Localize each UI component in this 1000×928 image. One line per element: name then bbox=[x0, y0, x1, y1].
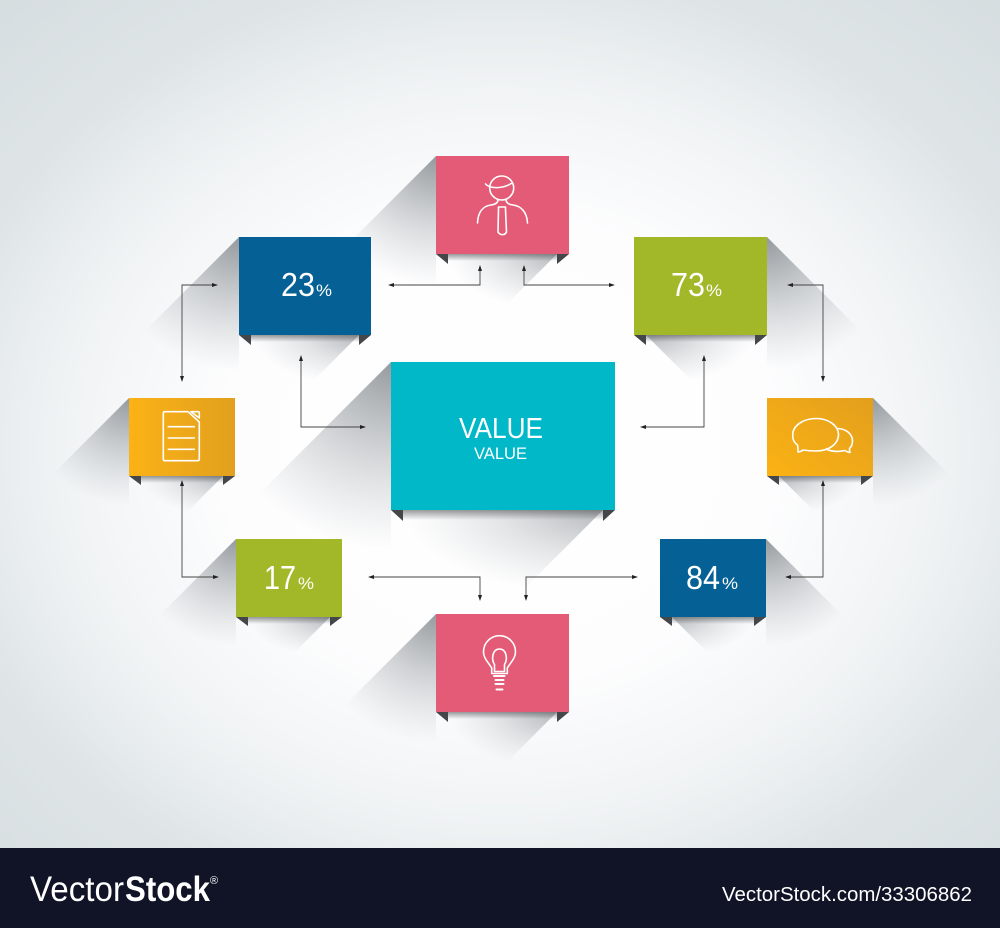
value: 23%: 23 bbox=[281, 266, 315, 303]
arrow: top card to blue 23% bbox=[388, 265, 482, 287]
footer bar bbox=[0, 848, 1000, 928]
arrow: blue 23% to document bbox=[180, 283, 218, 382]
panel: blue 23% card bbox=[105, 237, 371, 385]
subheading: VALUE: VALUE bbox=[474, 444, 527, 463]
arrow: green 17% to bottom card bbox=[368, 575, 482, 601]
icon: light bulb bbox=[484, 636, 516, 690]
arrow: top card to green 73% bbox=[522, 265, 615, 287]
footer image id: VectorStock.com/33306862 bbox=[722, 884, 972, 906]
value: 73%: 73 bbox=[671, 266, 705, 303]
arrow: center to green 73% bbox=[640, 355, 706, 429]
footer logo: Vector bbox=[30, 870, 124, 909]
footer logo: Stock bbox=[125, 870, 210, 909]
panel: green 17% card bbox=[129, 539, 342, 657]
icon: person with tie bbox=[478, 176, 528, 235]
panel: central value card bbox=[204, 362, 615, 595]
value: 17%: % bbox=[298, 574, 314, 593]
arrow: blue 84% to bottom card bbox=[524, 575, 638, 601]
arrow: center to blue 23% bbox=[299, 355, 366, 429]
panel: yellow document card bbox=[22, 398, 235, 516]
panel: blue 84% card bbox=[660, 539, 874, 657]
footer logo bbox=[30, 870, 218, 909]
footer logo: ® bbox=[210, 875, 218, 887]
arrow: blue 84% to speech bubbles bbox=[785, 480, 825, 579]
icon: speech bubbles bbox=[793, 418, 852, 452]
arrow: green 17% to document bbox=[180, 480, 219, 579]
panel: yellow speech bubbles card bbox=[767, 398, 981, 516]
value: 23%: % bbox=[316, 281, 332, 300]
value: 84%: 84 bbox=[686, 559, 720, 596]
panel: bottom pink light bulb card bbox=[307, 614, 569, 768]
value: 73%: % bbox=[706, 281, 722, 300]
value: 84%: % bbox=[722, 574, 738, 593]
panel: green 73% card bbox=[634, 237, 899, 385]
heading: VALUE: VALUE bbox=[459, 413, 543, 445]
panel: top pink person card bbox=[307, 156, 569, 310]
icon: document bbox=[163, 412, 199, 461]
arrow: green 73% to speech bubbles bbox=[787, 283, 825, 382]
value: 17%: 17 bbox=[264, 559, 296, 596]
